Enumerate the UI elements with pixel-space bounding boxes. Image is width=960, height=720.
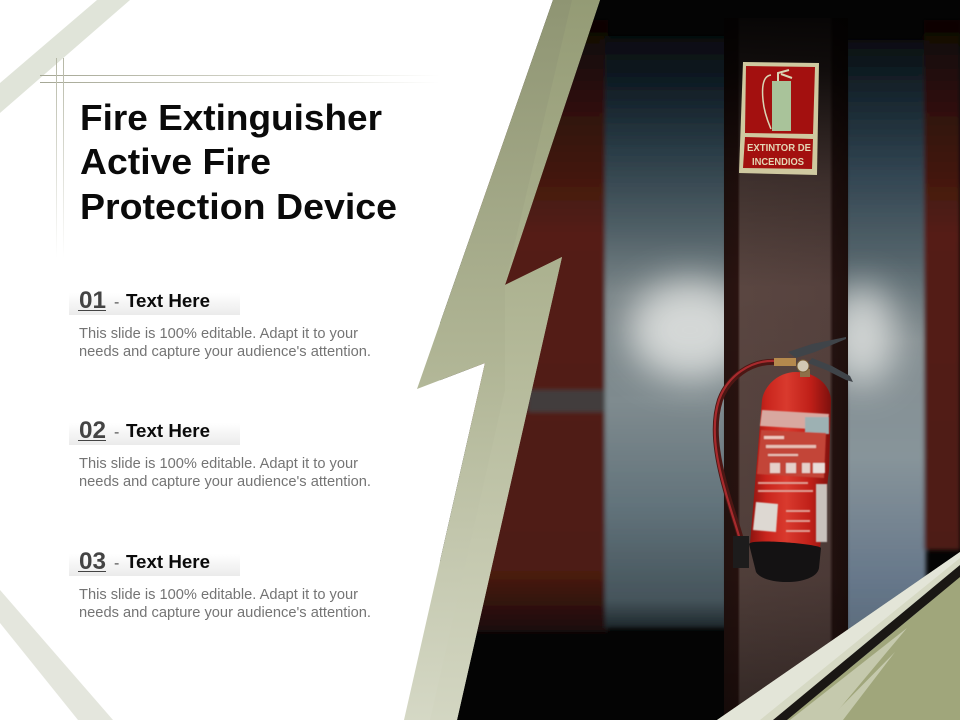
- item 02: [69, 417, 371, 490]
- title: Protection Device: [80, 186, 397, 227]
- item 01: [69, 287, 371, 360]
- item 03 description: This slide is 100% editable. Adapt it to your: [79, 586, 358, 603]
- icon: red fire extinguisher: [715, 337, 853, 582]
- item 02 heading: Text Here: [126, 421, 210, 441]
- item 02 heading: [69, 417, 240, 445]
- item 01 heading: Text Here: [126, 291, 210, 311]
- item 03 heading: -: [114, 555, 119, 572]
- title: Fire Extinguisher: [80, 97, 382, 138]
- item 03 heading: Text Here: [126, 552, 210, 572]
- item 03 heading: 03: [79, 548, 106, 575]
- item 01 heading: [69, 287, 240, 315]
- sign: extintor de incendios: [739, 62, 819, 175]
- title frame lines: [40, 58, 440, 258]
- item 03: [69, 548, 371, 621]
- title: Active Fire: [80, 141, 271, 182]
- item 02 description: [79, 455, 371, 490]
- item 01 heading: -: [114, 294, 119, 311]
- item 02 heading: -: [114, 424, 119, 441]
- item 02 description: This slide is 100% editable. Adapt it to your: [79, 455, 358, 472]
- item 02 description: needs and capture your audience's attention.: [79, 473, 371, 490]
- photo: fire extinguisher on post: [440, 0, 960, 720]
- lightning bolt shape: [404, 0, 600, 720]
- white left panel: [0, 0, 553, 720]
- sign: extintor de incendios: EXTINTOR DE: [747, 143, 811, 154]
- item 01 description: needs and capture your audience's attention.: [79, 343, 371, 360]
- title: [80, 97, 397, 227]
- item 02 heading: 02: [79, 417, 106, 444]
- item 03 description: [79, 586, 371, 621]
- item 01 description: This slide is 100% editable. Adapt it to your: [79, 325, 358, 342]
- item 03 description: needs and capture your audience's attention.: [79, 604, 371, 621]
- item 03 heading: [69, 548, 240, 576]
- bottom right corner accent: [717, 552, 960, 720]
- decorative stripe: bottom left: [0, 590, 113, 720]
- item 01 description: [79, 325, 371, 360]
- item 01 heading: 01: [79, 287, 106, 314]
- decorative stripe: top left: [0, 0, 130, 113]
- sign: extintor de incendios: INCENDIOS: [752, 157, 804, 168]
